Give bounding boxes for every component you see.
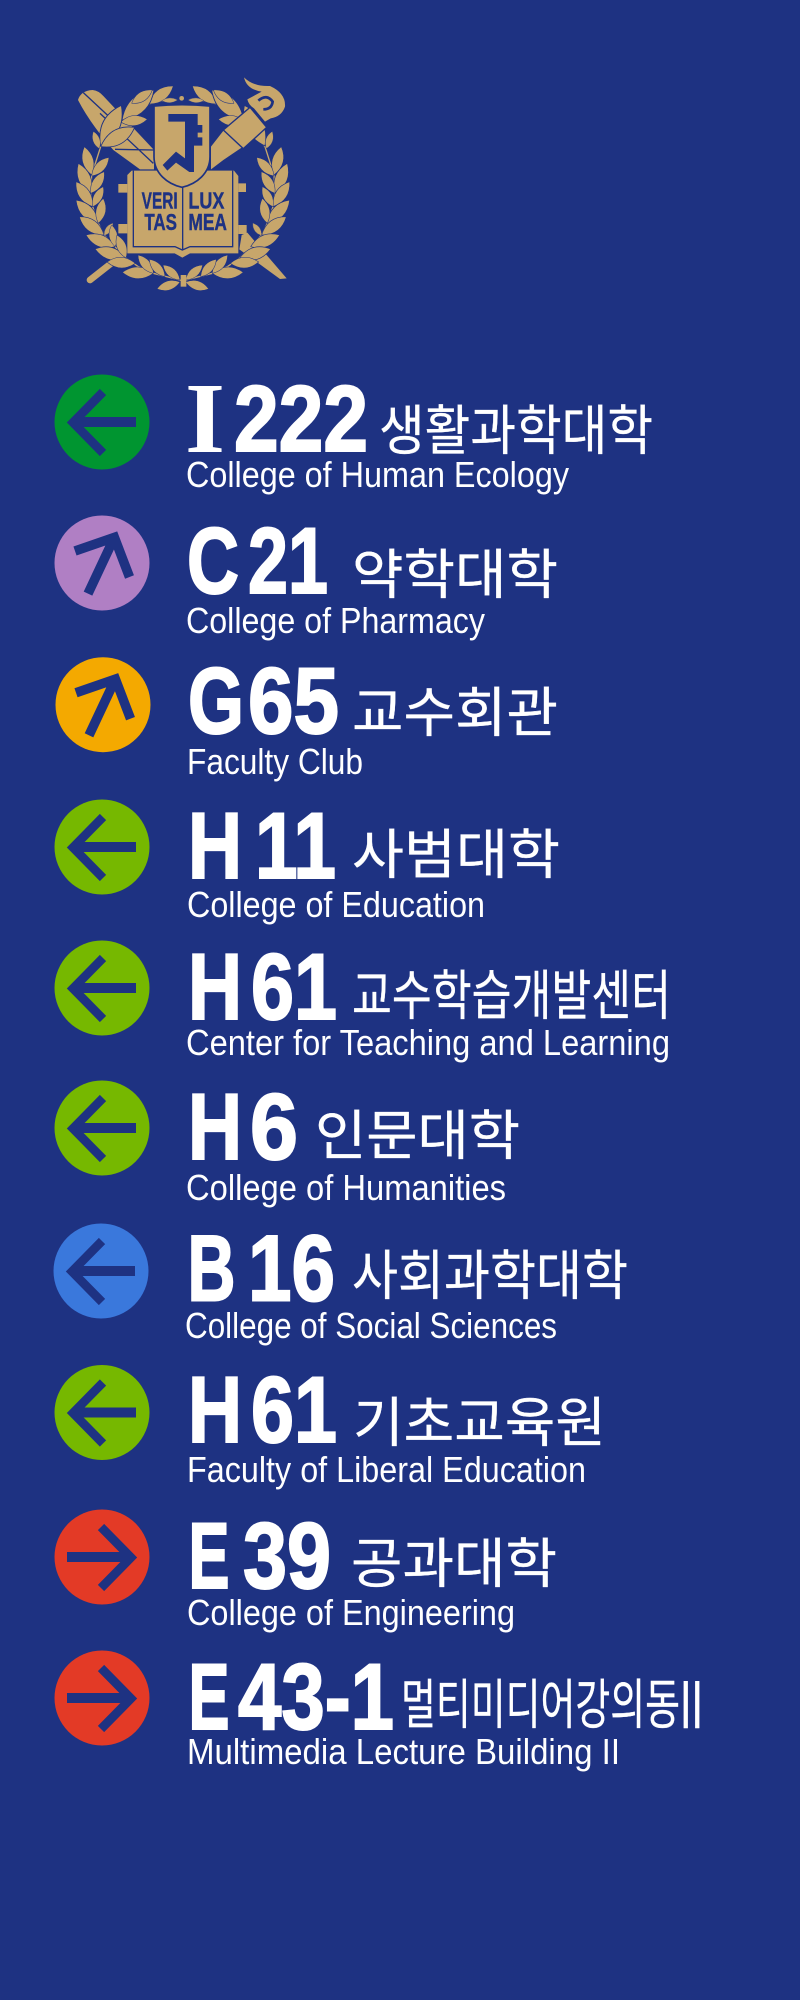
building code: 21 — [248, 508, 328, 613]
building code: 61 — [251, 934, 337, 1039]
icon: sword — [78, 90, 287, 280]
building code — [188, 1074, 298, 1179]
icon: left arrow, lime — [54, 1365, 150, 1460]
building code: B — [188, 1216, 236, 1321]
building code — [188, 1644, 394, 1749]
row: E39 College of Engineering — [54, 1503, 557, 1633]
Korean name: II — [680, 1667, 703, 1743]
Korean name: 교수회관 — [352, 684, 558, 744]
row: I222 College of Human Ecology — [54, 362, 653, 495]
Korean name: 교수학습개발센터 — [352, 966, 671, 1026]
building code: 11 — [255, 793, 336, 898]
building code: 16 — [248, 1216, 335, 1321]
icon: torch — [211, 77, 285, 169]
English name: College of Pharmacy — [186, 600, 485, 641]
icon: open book — [118, 171, 247, 258]
icon: left arrow, lime — [54, 940, 150, 1036]
row: E43-1 Multimedia Lecture Building II — [54, 1644, 703, 1772]
book motto — [142, 187, 227, 235]
building code — [188, 1357, 337, 1462]
building code: 61 — [251, 1357, 337, 1462]
English name: Center for Teaching and Learning — [186, 1022, 670, 1063]
book motto: LUX — [188, 187, 224, 213]
building code: E — [188, 1503, 230, 1608]
building code — [187, 508, 328, 613]
row: G65 Faculty Club — [56, 648, 558, 782]
icon: shield with key — [154, 105, 210, 187]
building code — [188, 1216, 335, 1321]
building code: 65 — [248, 648, 339, 753]
book motto: VERI — [142, 187, 178, 213]
building code: C — [187, 508, 239, 613]
row: H11 College of Education — [54, 793, 560, 925]
building code — [185, 362, 368, 474]
icon: laurel wreath — [71, 81, 294, 293]
icon: up-right arrow, orange — [56, 657, 150, 752]
building code: I — [185, 362, 225, 474]
book motto: TAS — [144, 209, 177, 235]
building code: 6 — [250, 1074, 298, 1179]
book motto: MEA — [188, 209, 227, 235]
row: B16 College of Social Sciences — [54, 1216, 628, 1346]
building code: E — [188, 1644, 230, 1749]
building code: H — [188, 934, 242, 1039]
Korean name: 공과대학 — [351, 1534, 557, 1594]
row: H6 College of Humanities — [54, 1074, 520, 1208]
icon: left arrow, lime — [54, 1080, 150, 1176]
icon: up-right arrow, purple — [54, 516, 150, 610]
building code: 43-1 — [238, 1644, 394, 1749]
English name: College of Social Sciences — [185, 1305, 557, 1346]
icon: right arrow, red — [54, 1650, 150, 1746]
logo: university emblem — [71, 77, 294, 293]
English name: College of Humanities — [186, 1167, 506, 1208]
Korean name — [401, 1667, 703, 1743]
building code: H — [188, 1074, 242, 1179]
English name: Multimedia Lecture Building II — [187, 1731, 620, 1772]
row: H61 Faculty of Liberal Education — [54, 1357, 606, 1490]
building code — [188, 1503, 331, 1608]
building code — [188, 793, 336, 898]
Korean name: 멀티미디어강의동 — [401, 1676, 680, 1736]
Korean name: 생활과학대학 — [379, 402, 653, 462]
building code — [188, 934, 337, 1039]
English name: College of Engineering — [187, 1592, 515, 1633]
building code: H — [188, 793, 242, 898]
row: C21 College of Pharmacy — [54, 508, 558, 641]
icon: left arrow, green — [54, 374, 150, 470]
English name: Faculty of Liberal Education — [187, 1449, 586, 1490]
Korean name: 기초교육원 — [353, 1394, 606, 1454]
building code: 222 — [234, 366, 368, 471]
English name: College of Education — [187, 884, 485, 925]
Korean name: 약학대학 — [352, 546, 558, 606]
left branch — [71, 81, 183, 293]
English name: Faculty Club — [187, 741, 363, 782]
icon: left arrow, lime — [54, 800, 150, 894]
Korean name: 사범대학 — [352, 826, 560, 886]
icon: right arrow, red — [54, 1510, 150, 1604]
row: H61 Center for Teaching and Learning — [54, 934, 671, 1063]
Korean name: 인문대학 — [315, 1106, 520, 1166]
building code: G — [188, 648, 244, 753]
building code: 39 — [243, 1503, 331, 1608]
building code — [188, 648, 339, 753]
building code: H — [188, 1357, 242, 1462]
Korean name: 사회과학대학 — [352, 1246, 628, 1306]
icon: left arrow, blue — [54, 1224, 148, 1318]
English name: College of Human Ecology — [186, 454, 569, 495]
right branch — [183, 81, 294, 293]
